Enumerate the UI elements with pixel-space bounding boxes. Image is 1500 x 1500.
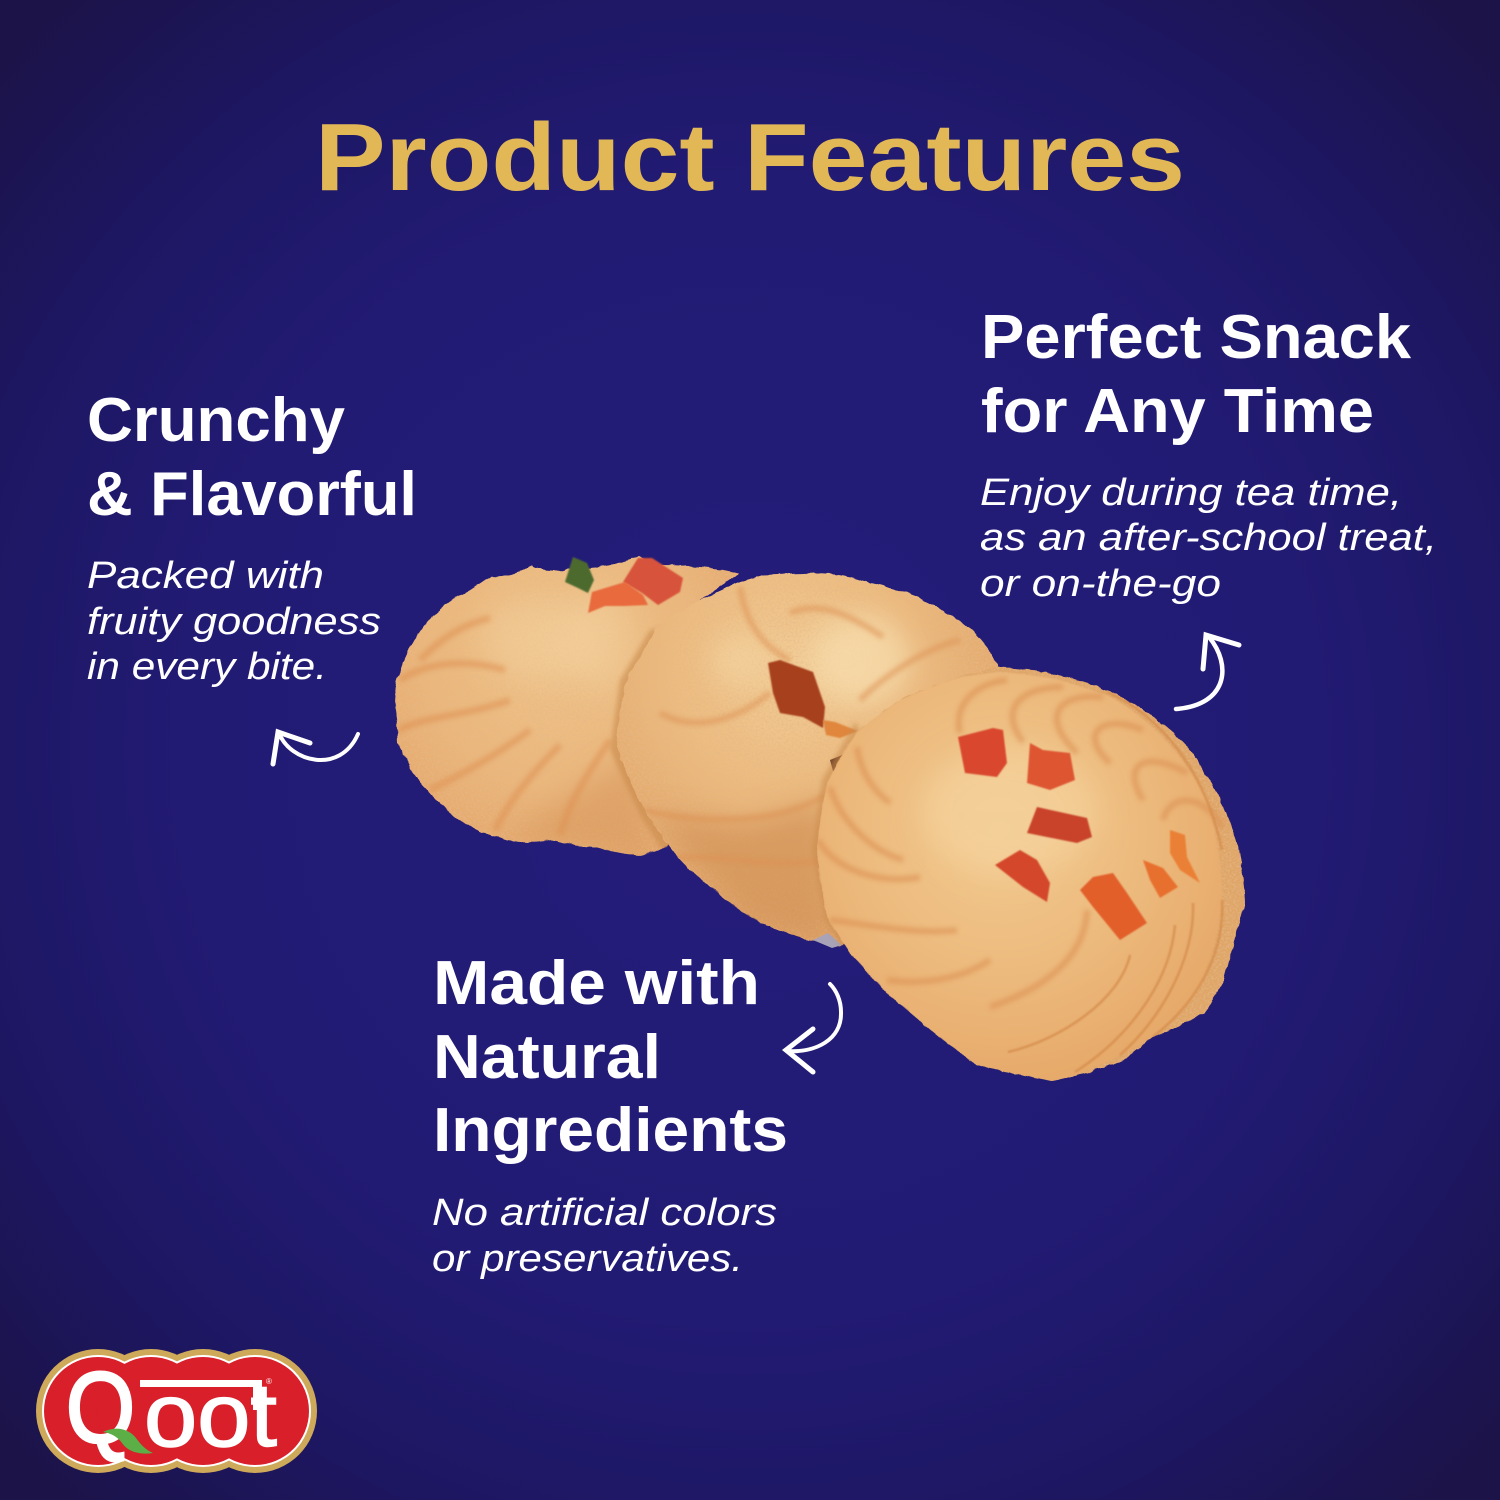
heading: Natural xyxy=(433,1023,661,1092)
arrow: natural ingredients xyxy=(786,984,841,1072)
description xyxy=(87,555,381,688)
description: or preservatives. xyxy=(432,1238,743,1280)
feature: natural ingredients xyxy=(432,949,788,1280)
description: Enjoy during tea time, xyxy=(980,472,1402,514)
heading: Crunchy xyxy=(87,386,346,455)
cookie: right xyxy=(817,667,1245,1081)
fruit: dark centre piece xyxy=(768,660,825,728)
title: Product Features xyxy=(315,104,1185,211)
heading xyxy=(981,303,1412,446)
cookie group xyxy=(394,557,1245,1081)
description: or on-the-go xyxy=(980,563,1221,605)
heading: Perfect Snack xyxy=(981,303,1412,372)
description: in every bite. xyxy=(87,646,327,688)
description: as an after-school treat, xyxy=(980,517,1437,559)
fruit: green piece xyxy=(565,557,594,593)
cookie: middle xyxy=(617,573,1000,948)
description xyxy=(432,1192,777,1280)
cookie shadow on middle cookie xyxy=(812,723,860,947)
description xyxy=(980,472,1437,605)
registered mark: ® xyxy=(266,1377,272,1386)
description: Packed with xyxy=(87,555,324,597)
heading: for Any Time xyxy=(981,377,1374,446)
logo: Qoot xyxy=(36,1349,317,1473)
heading: Made with xyxy=(433,949,760,1018)
logo wordmark xyxy=(66,1352,277,1466)
logo leaf xyxy=(103,1429,153,1454)
fruit: red piece xyxy=(623,558,683,605)
feature: perfect snack xyxy=(980,303,1437,605)
fruit: pieces xyxy=(958,728,1200,940)
description: No artificial colors xyxy=(432,1192,777,1234)
arrow: crunchy xyxy=(273,732,358,764)
cookie: left xyxy=(394,557,740,860)
fruit: glaze xyxy=(823,720,858,738)
heading: & Flavorful xyxy=(87,460,417,529)
cookie shadow on left cookie xyxy=(609,628,668,849)
fruit: orange piece xyxy=(588,582,648,613)
plate sliver xyxy=(813,933,842,948)
heading xyxy=(87,386,417,529)
logo wordmark: oot xyxy=(144,1366,277,1466)
heading: Ingredients xyxy=(433,1096,788,1165)
heading xyxy=(433,949,788,1165)
fruit: dark speck xyxy=(830,753,847,771)
description: fruity goodness xyxy=(87,601,381,643)
arrow: perfect snack xyxy=(1176,635,1239,709)
logo wordmark: Q xyxy=(66,1352,135,1464)
feature: crunchy and flavorful xyxy=(87,386,417,688)
